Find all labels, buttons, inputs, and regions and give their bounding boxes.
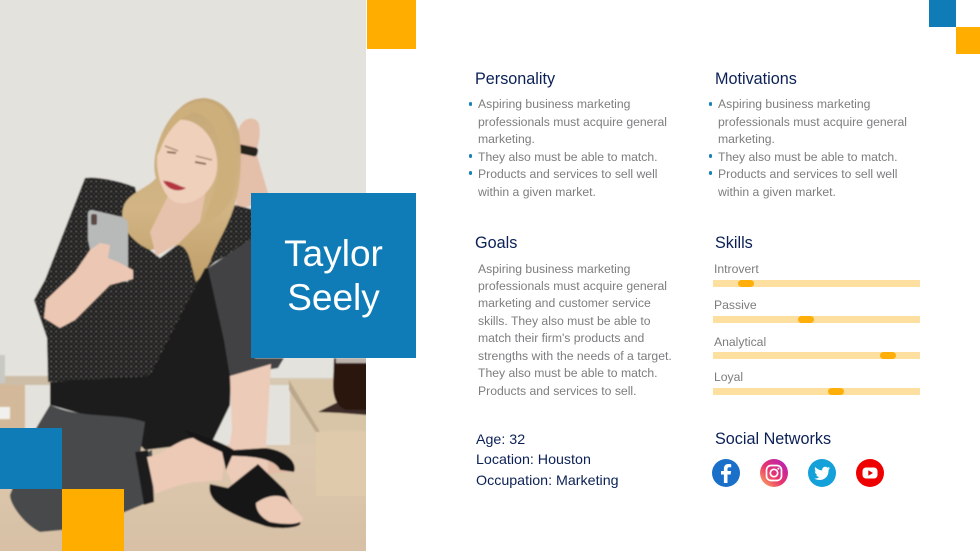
list: personality bullets: Aspiring business marketing (478, 97, 630, 111)
text: goals: professionals must acquire general (478, 279, 667, 293)
demographics text: Location: Houston (476, 452, 591, 468)
text: goals: They also must be able to match. (478, 366, 658, 380)
decorative square: orange bottom left (62, 489, 124, 551)
slider: analytical (713, 352, 920, 359)
wooden box right (290, 385, 317, 445)
list: motivations bullets: They also must be able to match. (718, 150, 898, 164)
label: loyal: Loyal (714, 370, 743, 384)
hand and forearm (44, 243, 133, 328)
heading: motivations: Motivations (715, 70, 797, 88)
list: motivations bullets: Aspiring business marketing (718, 97, 870, 111)
decorative square: blue top right (929, 0, 956, 27)
heading: personality: Personality (475, 70, 555, 88)
text: goals: Products and services to sell. (478, 384, 637, 398)
front hair strands (155, 102, 237, 226)
heading: social networks: Social Networks (715, 430, 831, 448)
text: goals: Aspiring business marketing (478, 262, 630, 276)
label: introvert: Introvert (714, 262, 759, 276)
list: motivations bullets: Products and services to sell well (718, 167, 898, 181)
neck and chest (150, 190, 206, 256)
name panel: Seely (287, 277, 380, 318)
text: goals (478, 262, 672, 398)
wooden box left (0, 385, 25, 435)
text: goals: skills. They also must be able to (478, 314, 651, 328)
phone (88, 210, 128, 282)
icon: twitter (808, 459, 836, 487)
photo: woman sitting on floor looking at phone (0, 0, 366, 551)
shirt (34, 178, 255, 382)
raised arm (236, 118, 270, 210)
list: personality bullets: marketing. (478, 132, 535, 146)
demographics text: Occupation: Marketing (476, 472, 619, 488)
demographics text (476, 432, 619, 488)
list: personality bullets: Products and services to sell well (478, 167, 658, 181)
upright lower leg denim (208, 236, 284, 376)
text: goals: marketing and customer service (478, 296, 651, 310)
decorative square: orange top (367, 0, 416, 49)
text: goals: strengths with the needs of a target. (478, 349, 672, 363)
list: motivations bullets: professionals must acquire general (718, 115, 907, 129)
heading: goals: Goals (475, 234, 517, 252)
bare foot (147, 438, 226, 494)
list: motivations bullets (709, 97, 907, 199)
decorative square: blue bottom left (0, 428, 62, 489)
black thigh (50, 268, 232, 450)
decorative square: orange top right (956, 27, 980, 54)
list: motivations bullets: marketing. (718, 132, 775, 146)
name panel (251, 193, 416, 358)
shin (226, 364, 272, 500)
wall (0, 0, 390, 460)
list: personality bullets: within a given market. (478, 185, 596, 199)
label: passive: Passive (714, 298, 757, 312)
list: personality bullets: professionals must acquire general (478, 115, 667, 129)
list: personality bullets: They also must be able to match. (478, 150, 658, 164)
list: motivations bullets: within a given market. (718, 185, 836, 199)
hair (122, 98, 241, 282)
heading: skills: Skills (715, 234, 753, 252)
floor (0, 445, 390, 551)
jeans near leg (10, 405, 154, 532)
slider: passive (713, 316, 920, 323)
slider: loyal (713, 388, 920, 395)
face (157, 120, 217, 203)
name panel: Taylor (284, 233, 383, 274)
sandals (184, 430, 295, 472)
icon: instagram (760, 459, 788, 487)
demographics text: Age: 32 (476, 432, 525, 448)
slider: introvert (713, 280, 920, 287)
drink glass (318, 401, 380, 416)
text: goals: match their firm's products and (478, 331, 644, 345)
icon: facebook (712, 459, 740, 487)
icon: youtube (856, 459, 884, 487)
list: personality bullets (469, 97, 667, 199)
label: analytical: Analytical (714, 335, 766, 349)
toes (256, 496, 303, 524)
